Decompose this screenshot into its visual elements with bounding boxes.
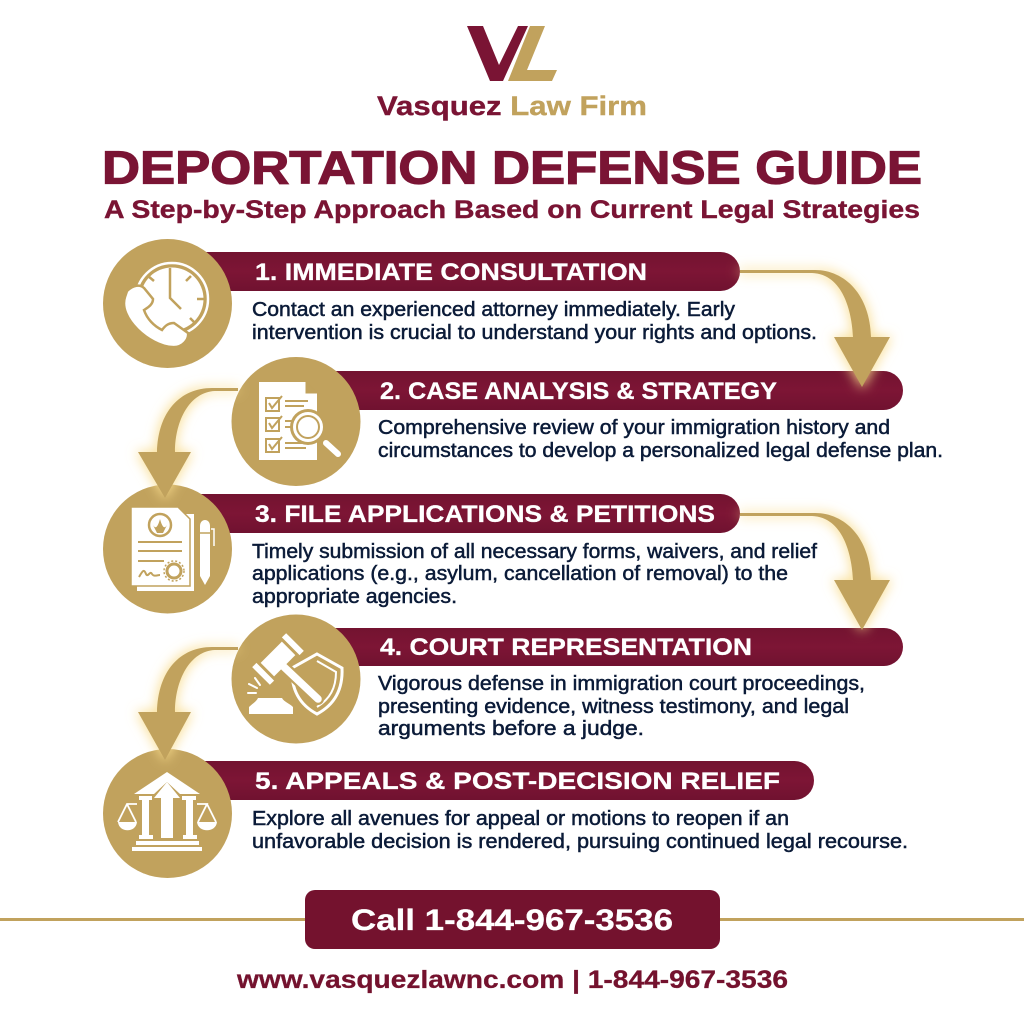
step 2 bbox=[232, 357, 943, 486]
step 4 circle bbox=[232, 614, 360, 744]
step 3 bbox=[103, 484, 817, 614]
step 4 banner bbox=[296, 628, 903, 666]
step 1 text: intervention is crucial to understand your rights and options. bbox=[252, 322, 817, 344]
title: DEPORTATION DEFENSE GUIDE bbox=[102, 142, 922, 194]
footer divider: left bbox=[0, 918, 310, 921]
arrow: step 3 to step 4 bbox=[740, 513, 890, 630]
call button: Call 1-844-967-3536 bbox=[351, 904, 673, 937]
step 1 bbox=[103, 239, 817, 368]
subtitle: A Step-by-Step Approach Based on Current Legal Strategies bbox=[104, 196, 920, 224]
step 5 bbox=[103, 749, 908, 878]
icon: courthouse, arrow and scales bbox=[118, 772, 217, 851]
icon: gavel and shield bbox=[248, 633, 342, 714]
step 4 bbox=[232, 614, 903, 744]
step 2 circle bbox=[232, 357, 360, 486]
logo mark: VL monogram bbox=[467, 26, 557, 81]
step 3 text: applications (e.g., asylum, cancellation of removal) to the bbox=[252, 563, 788, 585]
step 2 text: circumstances to develop a personalized legal defense plan. bbox=[378, 440, 943, 462]
arrow: step 1 to step 2 bbox=[740, 270, 890, 387]
step 5 heading: 5. APPEALS & POST-DECISION RELIEF bbox=[255, 768, 780, 795]
step 3 heading: 3. FILE APPLICATIONS & PETITIONS bbox=[255, 501, 715, 528]
step 2 banner bbox=[296, 371, 903, 410]
footer divider: right bbox=[715, 918, 1024, 921]
step 1 text: Contact an experienced attorney immediately. Early bbox=[252, 299, 735, 321]
step 5 text: unfavorable decision is rendered, pursuing continued legal recourse. bbox=[252, 831, 908, 853]
step 4 text: Vigorous defense in immigration court proceedings, bbox=[378, 673, 865, 695]
arrow: step 2 to step 3 bbox=[138, 388, 238, 498]
call button bbox=[305, 890, 720, 949]
step 5 text: Explore all avenues for appeal or motions to reopen if an bbox=[252, 808, 789, 830]
step 4 text: presenting evidence, witness testimony, and legal bbox=[378, 696, 849, 718]
icon: phone and clock bbox=[124, 263, 208, 347]
icon: checklist and magnifier bbox=[259, 382, 339, 460]
step 2 heading: 2. CASE ANALYSIS & STRATEGY bbox=[380, 378, 777, 405]
step 3 circle bbox=[103, 484, 232, 614]
step 4 heading: 4. COURT REPRESENTATION bbox=[380, 634, 752, 661]
step 2 text: Comprehensive review of your immigration history and bbox=[378, 417, 890, 439]
step 3 banner bbox=[167, 494, 740, 533]
step 3 text: Timely submission of all necessary forms, waivers, and relief bbox=[252, 541, 817, 563]
arrow: step 4 to step 5 bbox=[138, 647, 238, 760]
website and phone: www.vasquezlawnc.com | 1-844-967-3536 bbox=[236, 966, 788, 994]
step 4 text: arguments before a judge. bbox=[378, 718, 644, 740]
logo bbox=[377, 26, 647, 121]
step 5 circle bbox=[103, 749, 232, 878]
step 1 circle bbox=[103, 239, 232, 368]
step 3 text: appropriate agencies. bbox=[252, 586, 457, 608]
step 1 banner bbox=[167, 252, 740, 291]
logo wordmark: Vasquez Law Firm bbox=[377, 91, 647, 121]
step 5 banner bbox=[167, 761, 814, 800]
icon: legal document and pen bbox=[131, 507, 214, 591]
step 1 heading: 1. IMMEDIATE CONSULTATION bbox=[255, 259, 647, 286]
